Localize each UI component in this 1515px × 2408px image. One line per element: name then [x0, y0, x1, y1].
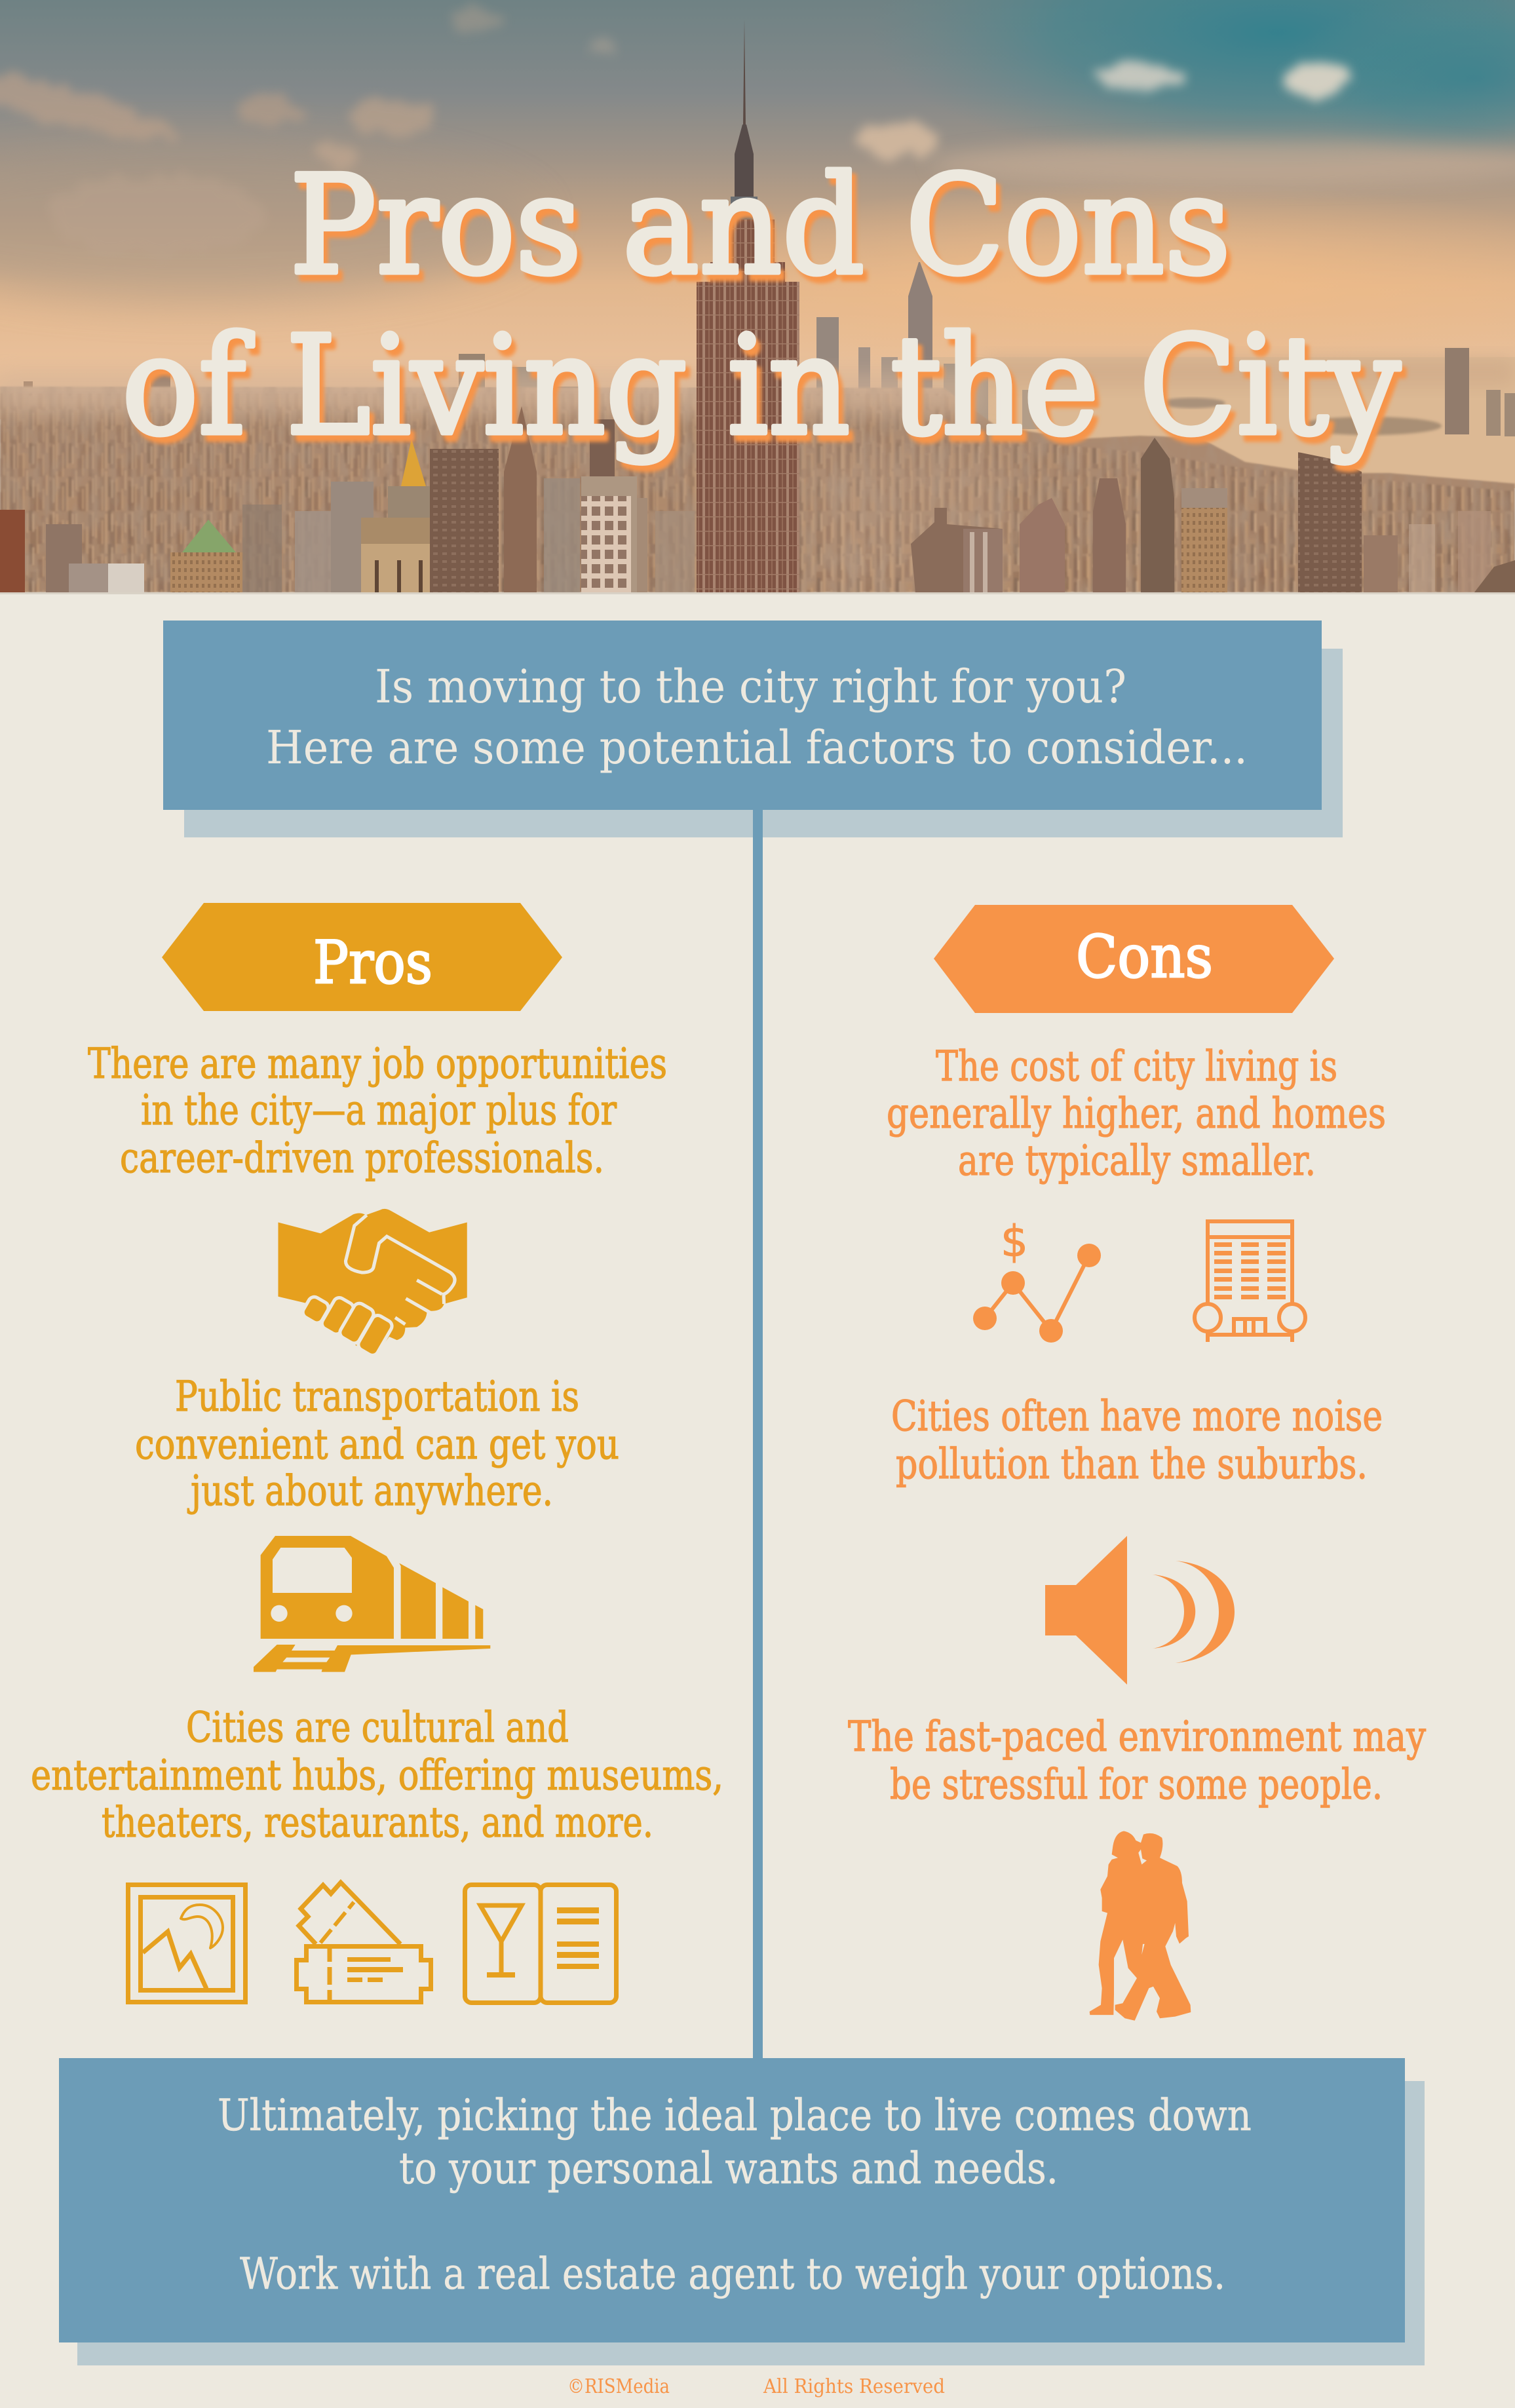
- distant towers: [24, 262, 1042, 472]
- intro box: Is moving to the city right for you?: [375, 660, 1126, 714]
- icon: train: [254, 1536, 490, 1672]
- text: public transportation: Public transportation is: [175, 1373, 579, 1421]
- intro box: Here are some potential factors to consider...: [266, 721, 1248, 774]
- hero bottom edge: [0, 592, 1515, 594]
- title: [122, 147, 1400, 466]
- text: noise pollution: [891, 1392, 1383, 1489]
- text: job opportunities: There are many job opportunities: [88, 1040, 667, 1088]
- closing box: Work with a real estate agent to weigh your options.: [240, 2249, 1225, 2299]
- cons heading badge: Cons: [1076, 923, 1213, 991]
- cons heading badge: [934, 905, 1334, 1013]
- icon: walking people: [1090, 1831, 1191, 2021]
- icon: framed art: [128, 1884, 245, 2002]
- foreground buildings: [0, 406, 1515, 592]
- title: of Living in the City: [122, 307, 1400, 466]
- text: noise pollution: pollution than the suburbs.: [896, 1440, 1368, 1489]
- text: fast-paced: [848, 1713, 1426, 1809]
- text: noise pollution: Cities often have more noise: [891, 1392, 1383, 1441]
- footer copyright: All Rights Reserved: [763, 2375, 945, 2398]
- text: fast-paced: be stressful for some people.: [890, 1761, 1383, 1809]
- text: cultural hubs: entertainment hubs, offering museums,: [31, 1751, 723, 1800]
- icon: handshake: [278, 1209, 467, 1358]
- footer copyright: [567, 2375, 945, 2398]
- text: cost of living: The cost of city living is: [936, 1042, 1337, 1091]
- text: job opportunities: career-driven professionals.: [120, 1134, 604, 1183]
- closing box: to your personal wants and needs.: [399, 2143, 1058, 2194]
- text: cost of living: generally higher, and homes: [887, 1090, 1386, 1138]
- text: public transportation: just about anywhere.: [187, 1467, 553, 1516]
- text: cost of living: are typically smaller.: [958, 1137, 1316, 1185]
- text: job opportunities: [88, 1040, 667, 1183]
- icon: speaker: [1045, 1536, 1235, 1685]
- far shore and water: [917, 348, 1515, 488]
- text: job opportunities: in the city—a major plus for: [141, 1086, 617, 1135]
- intro box: [163, 621, 1343, 837]
- icon: apartment building: [1195, 1221, 1305, 1342]
- footer copyright: ©RISMedia: [567, 2375, 670, 2398]
- Empire State Building: [697, 20, 799, 592]
- panel: cons: [848, 905, 1426, 2021]
- text: cultural hubs: Cities are cultural and: [186, 1704, 569, 1752]
- dense city mass: [0, 373, 1515, 592]
- panel: pros: [31, 903, 723, 2004]
- center divider: [753, 810, 763, 2059]
- text: cultural hubs: theaters, restaurants, and more.: [102, 1799, 653, 1847]
- closing box: Ultimately, picking the ideal place to live comes down: [218, 2090, 1252, 2141]
- sky: [0, 0, 1515, 419]
- text: public transportation: [135, 1373, 619, 1516]
- pros heading badge: Pros: [313, 928, 432, 997]
- icon: rising cost chart: $: [1001, 1216, 1028, 1267]
- title: Pros and Cons: [290, 147, 1231, 305]
- pros heading badge: [162, 903, 562, 1011]
- hero photo: city skyline: [0, 0, 1515, 592]
- icon: tickets: [296, 1882, 431, 2004]
- text: public transportation: convenient and can get you: [135, 1421, 619, 1469]
- icon: rising cost chart: [973, 1216, 1101, 1343]
- closing box: [59, 2058, 1425, 2365]
- text: cost of living: [887, 1042, 1386, 1185]
- text: cultural hubs: [31, 1704, 723, 1847]
- icon: cocktail menu: [465, 1884, 616, 2002]
